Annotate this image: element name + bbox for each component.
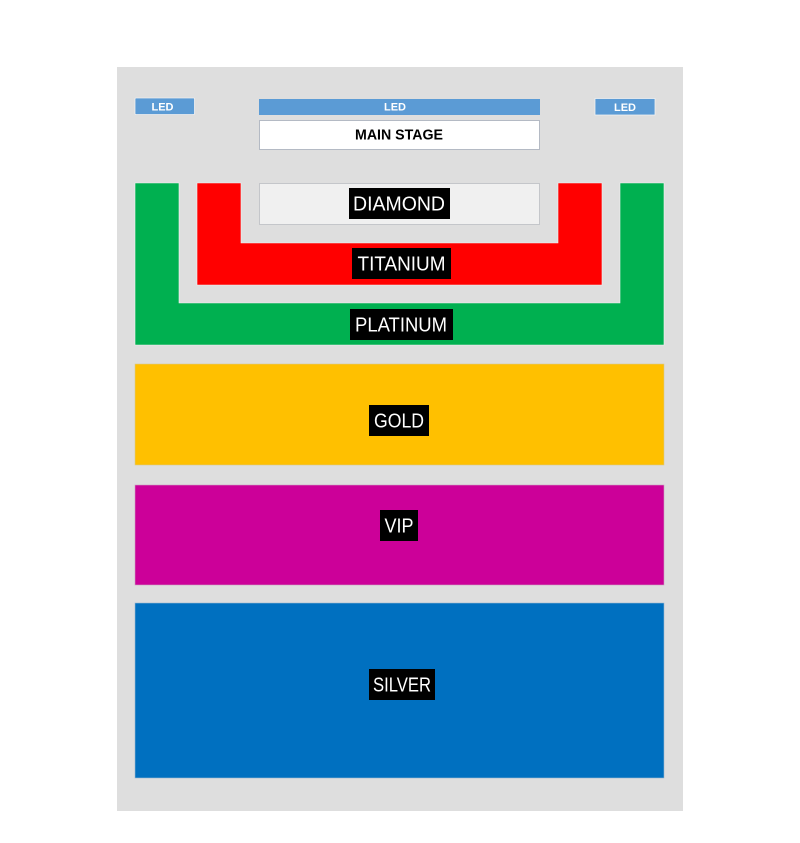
platinum label: PLATINUM xyxy=(355,314,447,336)
diamond label xyxy=(349,188,450,219)
center LED screen: LED xyxy=(384,102,406,114)
diamond label: DIAMOND xyxy=(353,194,445,216)
titanium label: TITANIUM xyxy=(358,254,446,276)
main stage: MAIN STAGE xyxy=(355,128,443,144)
left LED screen: LED xyxy=(152,102,174,114)
VIP zone xyxy=(135,485,664,585)
silver label xyxy=(369,669,435,700)
titanium label xyxy=(352,248,451,279)
titanium zone xyxy=(197,183,602,285)
gold label: GOLD xyxy=(374,410,424,432)
left LED screen xyxy=(135,98,194,114)
main stage xyxy=(260,120,540,150)
silver zone xyxy=(135,603,664,778)
center LED screen xyxy=(259,99,540,115)
platinum zone xyxy=(135,183,664,345)
gold zone xyxy=(135,364,664,465)
silver label: SILVER xyxy=(373,674,431,696)
VIP label xyxy=(380,510,418,541)
VIP label: VIP xyxy=(384,516,414,538)
diamond zone xyxy=(260,184,540,224)
right LED screen: LED xyxy=(614,102,636,114)
right LED screen xyxy=(595,98,655,115)
venue floor panel xyxy=(117,67,683,811)
gold label xyxy=(369,405,429,436)
platinum label xyxy=(350,309,453,340)
